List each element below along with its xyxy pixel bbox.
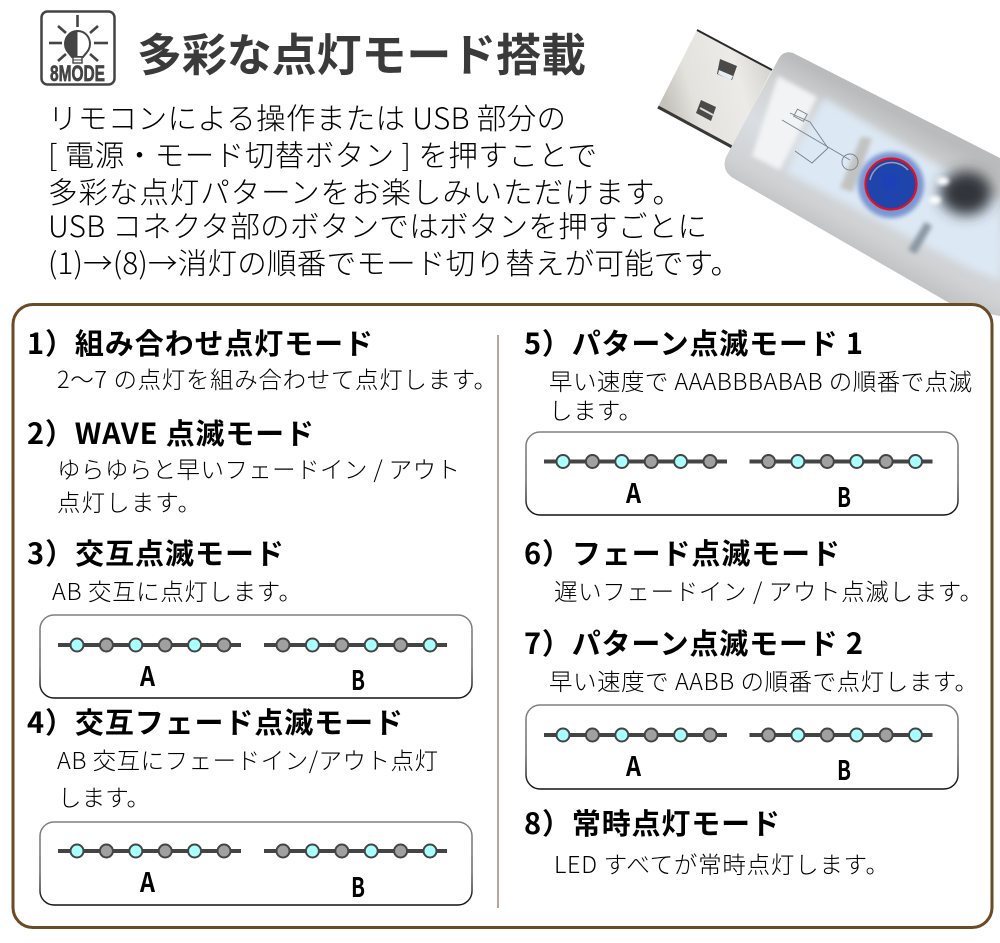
diagram: mode 4 A/B LEDs [40,822,472,905]
mode 1 [27,321,497,395]
diagram: mode 3 A/B LEDs: B [351,659,365,698]
intro text: USB コネクタ部のボタンではボタンを押すごとに [48,204,707,246]
mode 2: 2）WAVE 点滅モード [27,411,314,453]
icon: 8 mode light bulb [42,12,114,86]
mode 6: 遅いフェードイン / アウト点滅します。 [554,573,983,607]
mode 6: 6）フェード点滅モード [524,531,840,573]
intro text: (1)→(8)→消灯の順番でモード切り替えが可能です。 [48,241,740,283]
mode 4: 4）交互フェード点滅モード [27,700,403,742]
mode 2: ゆらゆらと早いフェードイン / アウト [57,451,460,485]
mode 8: 8）常時点灯モード [524,801,780,843]
diagram: mode 5 A/B LEDs: B [837,476,851,515]
diagram: mode 7 A/B LEDs: B [837,749,851,788]
diagram: mode 3 A/B LEDs: A [139,655,156,694]
mode 5: します。 [549,392,642,426]
mode 2: 点灯します。 [57,484,201,518]
mode 6 [524,531,983,607]
mode 3: 3）交互点滅モード [27,531,284,573]
intro text: 多彩な点灯パターンをお楽しみいただけます。 [48,170,682,212]
diagram: mode 7 A/B LEDs: A [625,745,642,784]
mode 4: します。 [58,779,150,813]
diagram: mode 4 A/B LEDs: B [351,866,365,905]
mode 7 [524,621,978,789]
mode 5 [524,321,972,515]
mode 7: 早い速度で AABB の順番で点灯します。 [549,663,978,697]
diagram: mode 5 A/B LEDs [526,432,958,515]
mode 1: 1）組み合わせ点灯モード [27,321,373,363]
title: 多彩な点灯モード搭載 [137,19,586,84]
button: blue with red ring [858,152,924,218]
intro text: [ 電源・モード切替ボタン ] を押すことで [48,133,597,175]
USB metal plug [658,30,772,147]
USB symbol [782,109,858,170]
diagram: mode 7 A/B LEDs [526,705,958,789]
mode 5: 早い速度で AAABBBABAB の順番で点滅 [549,363,972,397]
mode 2 [27,411,460,518]
mode 4: AB 交互にフェードイン/アウト点灯 [57,742,438,776]
mode 3: AB 交互に点灯します。 [52,573,302,607]
mode 7: 7）パターン点滅モード 2 [524,621,863,663]
intro text: リモコンによる操作または USB 部分の [48,96,566,138]
intro text [48,96,740,283]
diagram: mode 5 A/B LEDs: A [625,472,642,511]
mode 4 [27,700,472,905]
panel: mode list [13,304,992,928]
mode 5: 5）パターン点滅モード 1 [524,321,863,363]
diagram: mode 4 A/B LEDs: A [139,861,156,900]
mode 8: LED すべてが常時点灯します。 [554,846,889,880]
mode 3 [27,531,472,698]
image: USB connector with button [658,30,1000,316]
translucent shell [725,52,1000,316]
icon: 8 mode light bulb: 8MODE [50,61,105,86]
diagram: mode 3 A/B LEDs [40,615,472,698]
mode 1: 2〜7 の点灯を組み合わせて点灯します。 [57,361,497,395]
mode 8 [524,801,889,880]
